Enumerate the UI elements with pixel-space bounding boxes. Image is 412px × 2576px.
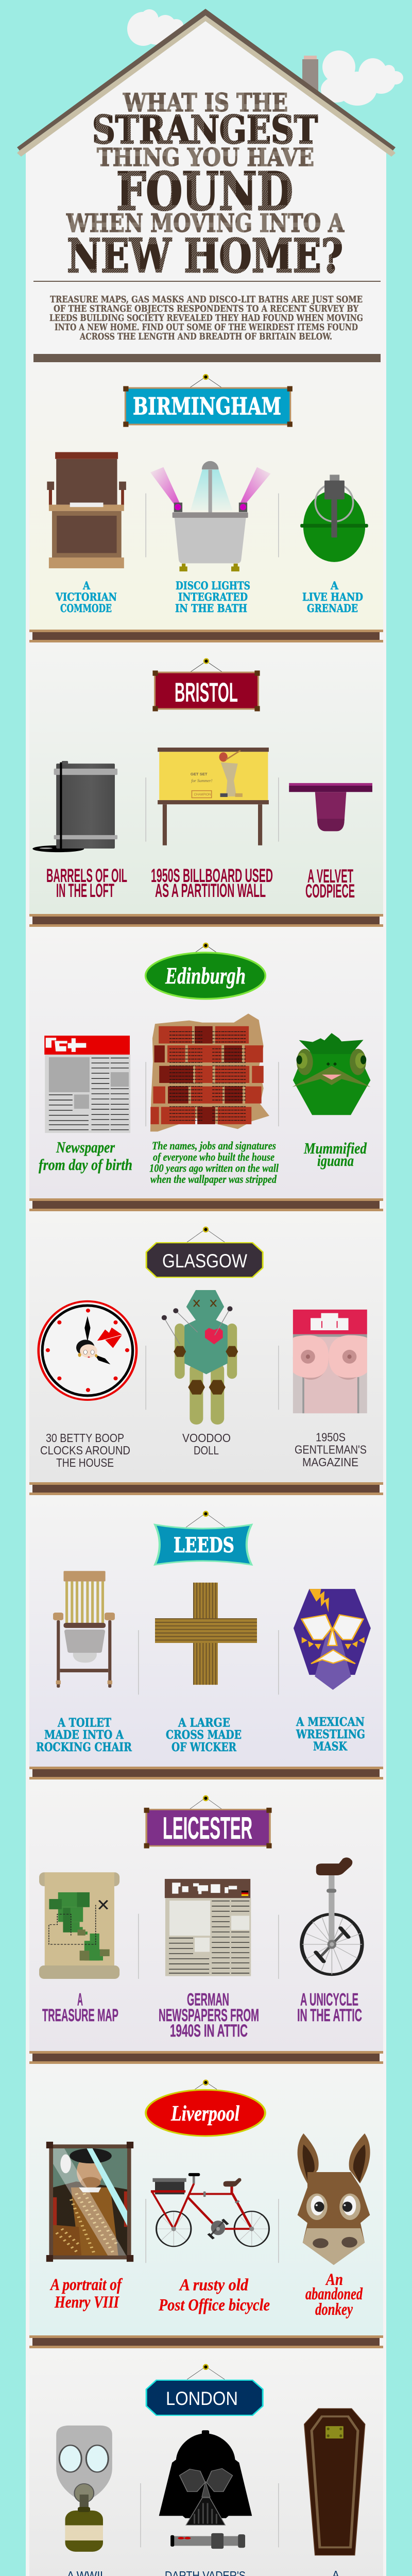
captions: Birmingham: COMMODE: [60, 602, 112, 615]
shelf: [29, 1198, 383, 1211]
captions: Liverpool: A rusty old: [179, 2276, 248, 2295]
sign: Leicester: [144, 1795, 272, 1849]
shelf: [29, 630, 383, 642]
panel: Edinburgh: [29, 927, 383, 1211]
title: FOUND: [116, 161, 293, 222]
captions: Leeds: A TOILET: [57, 1716, 111, 1730]
icon: 1950s billboard: CHAMPION: [194, 793, 211, 796]
captions: Bristol: IN THE LOFT: [56, 880, 114, 901]
captions: Leeds: A LARGE: [178, 1716, 230, 1730]
icon: treasure map: [39, 1872, 119, 1979]
panel: Birmingham: [29, 362, 383, 642]
icon: donkey head: [298, 2133, 370, 2265]
shelf: [29, 1482, 383, 1495]
captions: Bristol: A VELVET: [307, 866, 353, 887]
intro text: OF THE STRANGE OBJECTS RESPONDENTS TO A RECENT SURVEY BY: [54, 303, 358, 314]
icon: hand grenade: [300, 474, 368, 562]
captions: Glasgow: [40, 1430, 367, 1469]
icon: disco bath: [150, 461, 271, 571]
sign: Glasgow: [146, 1227, 263, 1277]
captions: Glasgow: 1950S: [316, 1430, 346, 1444]
captions: Birmingham: A: [82, 579, 90, 592]
captions: Leeds: MADE INTO A: [44, 1727, 124, 1742]
captions: Edinburgh: 100 years ago written on the wall: [149, 1161, 279, 1175]
icon: coffin: [304, 2409, 365, 2555]
captions: Birmingham: LIVE HAND: [302, 590, 363, 603]
title: THING YOU HAVE: [97, 143, 314, 172]
captions: Leicester: TREASURE MAP: [42, 2006, 118, 2025]
sign: Leicester: LEICESTER: [163, 1811, 252, 1845]
captions: Glasgow: CLOCKS AROUND: [40, 1444, 130, 1457]
captions: Leeds: MASK: [313, 1739, 348, 1754]
icon: Victorian commode: [47, 452, 126, 568]
sign: Liverpool: [146, 2079, 265, 2136]
captions: Glasgow: VOODOO: [182, 1431, 231, 1445]
icon: portrait of Henry VIII: [46, 2142, 133, 2262]
sign: Leeds: [155, 1511, 251, 1565]
captions: Birmingham: INTEGRATED: [178, 590, 248, 603]
captions: Bristol: BARRELS OF OIL: [46, 865, 127, 886]
icon: 1950s billboard: [158, 748, 269, 845]
icon: Post Office bicycle: [151, 2173, 269, 2246]
captions: Edinburgh: [39, 1138, 367, 1185]
intro text: LEEDS BUILDING SOCIETY REVEALED THEY HAD FOUND WHEN MOVING: [49, 313, 363, 324]
intro text: [49, 294, 363, 342]
captions: Edinburgh: iguana: [317, 1151, 354, 1170]
captions: Glasgow: MAGAZINE: [302, 1455, 358, 1469]
panel: Glasgow: [29, 1211, 383, 1495]
captions: Liverpool: Henry VIII: [54, 2293, 119, 2312]
captions: Liverpool: An: [325, 2270, 343, 2289]
panel: London: [29, 2348, 383, 2576]
icon: 1950s billboard: GET SET: [191, 772, 208, 776]
captions: Bristol: AS A PARTITION WALL: [155, 880, 266, 901]
intro text: ACROSS THE LENGTH AND BREADTH OF BRITAIN BELOW.: [79, 331, 332, 342]
panel: Bristol: CODPIECE: [305, 880, 355, 902]
title: WHEN MOVING INTO A: [66, 208, 345, 238]
icon: wicker cross: [155, 1583, 257, 1685]
captions: Glasgow: THE HOUSE: [56, 1456, 114, 1469]
panel: Bristol: [29, 642, 383, 927]
captions: Birmingham: VICTORIAN: [55, 590, 117, 603]
captions: London: [58, 2568, 352, 2576]
captions: Leeds: WRESTLING: [296, 1727, 365, 1741]
shelf: [29, 1767, 383, 1780]
icon: gas mask: [56, 2426, 112, 2552]
title: [66, 88, 345, 283]
icon: barrel of oil: [32, 761, 117, 852]
sign: Bristol: BRISTOL: [175, 677, 238, 708]
captions: Leeds: OF WICKER: [171, 1740, 236, 1754]
captions: Leeds: [36, 1715, 365, 1754]
captions: Bristol: 1950S BILLBOARD USED: [151, 865, 273, 886]
captions: Edinburgh: when the wallpaper was stripped: [150, 1173, 277, 1185]
captions: Liverpool: abandoned: [305, 2285, 363, 2303]
shelf: [29, 914, 383, 927]
captions: Edinburgh: Newspaper: [56, 1138, 115, 1156]
captions: Leicester: 1940S IN ATTIC: [170, 2021, 248, 2041]
shelf: [29, 2335, 383, 2348]
icon: unicycle: [302, 1857, 362, 1975]
icon: mummified iguana: [292, 1033, 370, 1115]
clouds: [127, 9, 403, 106]
intro text: TREASURE MAPS, GAS MASKS AND DISCO-LIT BATHS ARE JUST SOME: [50, 294, 363, 305]
captions: Leicester: IN THE ATTIC: [297, 2006, 362, 2025]
sign: Liverpool: Liverpool: [170, 2102, 239, 2126]
icon: 1950s billboard: for Summer!: [191, 778, 213, 783]
intro text: INTO A NEW HOME. FIND OUT SOME OF THE WEIRDEST ITEMS FOUND: [55, 322, 358, 333]
icon: Mexican wrestling mask: [294, 1589, 371, 1690]
captions: Leicester: NEWSPAPERS FROM: [159, 2006, 259, 2025]
captions: Leicester: A: [77, 1990, 83, 2010]
sign: London: LONDON: [166, 2388, 238, 2409]
captions: Leeds: CROSS MADE: [166, 1727, 242, 1742]
sign: Birmingham: BIRMINGHAM: [133, 393, 281, 420]
icon: brick wall with signatures: [150, 1013, 269, 1131]
sign: Bristol: [152, 658, 260, 711]
captions: Liverpool: Post Office bicycle: [158, 2296, 270, 2315]
icon: Darth Vader helmet and light sabre: [159, 2430, 252, 2549]
captions: Leeds: ROCKING CHAIR: [36, 1740, 132, 1754]
sign: Birmingham: [123, 374, 293, 427]
captions: Leeds: A MEXICAN: [296, 1715, 365, 1729]
captions: Glasgow: 30 BETTY BOOP: [46, 1431, 124, 1445]
captions: Leicester: A UNICYCLE: [300, 1990, 358, 2010]
captions: Birmingham: IN THE BATH: [175, 602, 247, 615]
captions: Edinburgh: The names, jobs and signatures: [152, 1139, 276, 1152]
title: STRANGEST: [92, 107, 318, 152]
captions: Edinburgh: of everyone who built the house: [153, 1150, 274, 1163]
sign: Leeds: LEEDS: [174, 1533, 234, 1557]
shelf: [29, 2051, 383, 2064]
icon: Betty Boop clock: [37, 1300, 138, 1401]
captions: Glasgow: GENTLEMAN'S: [295, 1443, 367, 1456]
sign: London: [146, 2364, 263, 2415]
panel: Leeds: [29, 1495, 383, 1780]
icon: gentleman's magazine: [293, 1310, 367, 1413]
icon: newspaper: [44, 1036, 130, 1133]
captions: Birmingham: A: [330, 579, 338, 592]
captions: Birmingham: DISCO LIGHTS: [176, 579, 250, 592]
sign: Edinburgh: Edinburgh: [165, 962, 246, 989]
captions: Edinburgh: from day of birth: [39, 1156, 132, 1174]
panel: Leicester: [29, 1780, 383, 2064]
captions: Edinburgh: Mummified: [303, 1139, 367, 1157]
icon: German newspaper: [165, 1879, 251, 1976]
captions: Birmingham: GRENADE: [307, 602, 358, 615]
captions: Glasgow: DOLL: [194, 1444, 219, 1457]
sign: Glasgow: GLASGOW: [162, 1250, 247, 1272]
captions: Birmingham: [55, 579, 363, 615]
captions: Liverpool: A portrait of: [49, 2276, 123, 2294]
captions: Leicester: GERMAN: [187, 1990, 229, 2010]
title: WHAT IS THE: [123, 88, 288, 117]
captions: Liverpool: donkey: [315, 2300, 353, 2319]
panel: Liverpool: [29, 2064, 383, 2348]
captions: Bristol: [46, 865, 355, 902]
icon: velvet codpiece: [289, 783, 372, 831]
icon: rocking chair toilet: [53, 1571, 115, 1688]
captions: Liverpool: [49, 2270, 363, 2319]
chimney: [302, 56, 318, 95]
captions: Leicester: [42, 1990, 362, 2041]
icon: voodoo doll: [162, 1290, 238, 1425]
sign: Edinburgh: [146, 943, 265, 999]
title: NEW HOME?: [67, 229, 343, 283]
